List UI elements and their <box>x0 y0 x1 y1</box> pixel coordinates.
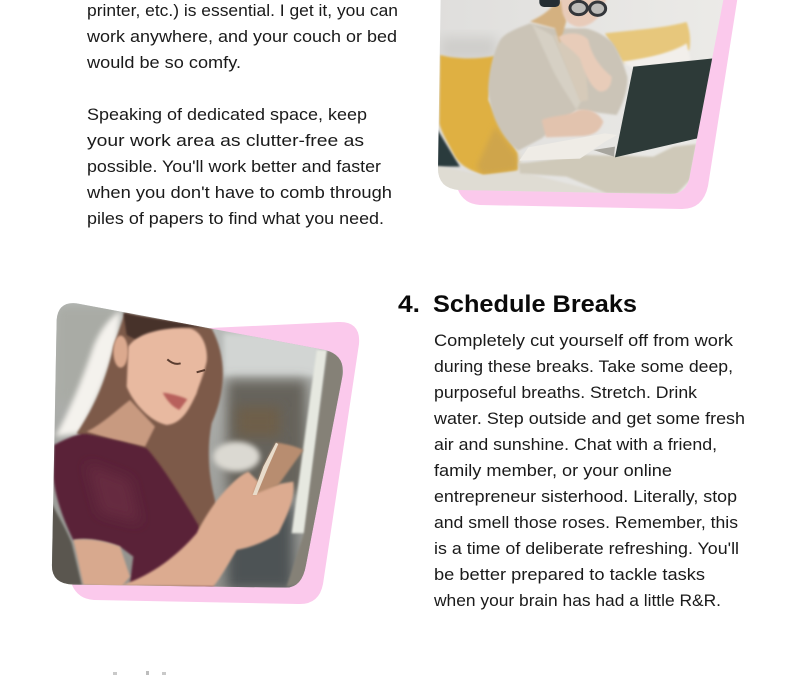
photo: woman using a phone with pink backing <box>47 297 359 604</box>
text block: schedule breaks paragraph: water. Step outside and get some fresh <box>433 409 745 428</box>
arms and hands <box>73 539 130 587</box>
yellow pillow <box>439 55 517 175</box>
text block: workspace paragraphs: when you don't have to comb through <box>86 183 392 202</box>
sheet <box>438 165 600 192</box>
text block: workspace paragraphs: printer, etc.) is essential. I get it, you can <box>87 1 398 20</box>
face <box>560 0 607 27</box>
pink backing shape <box>72 322 359 604</box>
text block: schedule breaks paragraph: be better prepared to tackle tasks <box>434 565 705 584</box>
text block: workspace paragraphs: work anywhere, and your couch or bed <box>86 27 397 46</box>
laptop <box>615 58 713 157</box>
glasses <box>570 1 606 15</box>
text block: schedule breaks paragraph: air and sunshine. Chat with a friend, <box>434 435 717 454</box>
photo: woman with laptop on a sofa with pink backing <box>433 0 738 209</box>
laptop photo <box>433 0 733 197</box>
text block: schedule breaks paragraph: during these breaks. Take some deep, <box>434 357 733 376</box>
sweater <box>488 23 627 151</box>
text block: schedule breaks paragraph: purposeful breaths. Stretch. Drink <box>434 383 698 402</box>
face <box>127 328 207 425</box>
text block: workspace paragraphs: piles of papers to find what you need. <box>87 209 384 228</box>
blurred street background <box>223 333 320 377</box>
text block: schedule breaks paragraph: entrepreneur sisterhood. Literally, stop <box>434 487 737 506</box>
hair and headphone <box>530 0 567 43</box>
text block: schedule breaks paragraph: when your brain has had a little R&R. <box>433 591 721 610</box>
text block: workspace paragraphs <box>86 1 398 228</box>
blanket legs <box>518 144 697 194</box>
text block: workspace paragraphs: possible. You'll work better and faster <box>87 157 381 176</box>
arm and hands <box>558 33 612 92</box>
heading: 4. Schedule Breaks: Schedule Breaks <box>433 291 637 318</box>
text block: schedule breaks paragraph: and smell those roses. Remember, this <box>434 513 738 532</box>
text block: workspace paragraphs: Speaking of dedicated space, keep <box>87 105 367 124</box>
pink backing shape <box>458 0 738 209</box>
back cushions <box>605 22 690 63</box>
neck <box>87 400 155 447</box>
text block: workspace paragraphs: would be so comfy. <box>86 53 241 72</box>
text block: workspace paragraphs: your work area as clutter-free as <box>87 131 364 150</box>
dark sofa <box>437 128 460 167</box>
shirt <box>53 434 213 587</box>
text block: schedule breaks paragraph: family member, or your online <box>434 461 672 480</box>
text block: schedule breaks paragraph <box>433 331 745 610</box>
text block: schedule breaks paragraph: is a time of deliberate refreshing. You'll <box>434 539 739 558</box>
phone photo <box>47 297 347 593</box>
text block: schedule breaks paragraph: Completely cut yourself off from work <box>434 331 734 350</box>
heading: 4. Schedule Breaks: 4. <box>398 291 420 318</box>
notebook <box>519 133 617 161</box>
phone <box>253 443 303 495</box>
hair back <box>77 313 223 533</box>
left background <box>53 303 120 403</box>
